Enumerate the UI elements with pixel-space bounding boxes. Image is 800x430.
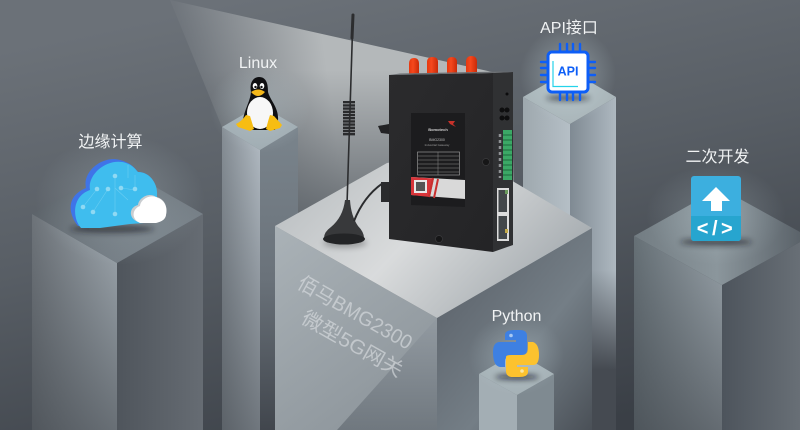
device shell [389, 73, 493, 252]
front label: BMG2300 [429, 138, 445, 142]
back block [170, 0, 523, 430]
caption line 2: 微型5G网关 [298, 306, 407, 382]
front label [411, 113, 465, 207]
icon: Linux penguin [236, 77, 282, 131]
red antenna caps [409, 56, 477, 74]
icon: upload code card: </> [697, 218, 736, 240]
label: API interface: API接口 [540, 19, 598, 37]
magnetic antenna [323, 15, 390, 248]
screws [482, 158, 490, 166]
ethernet ports [497, 188, 509, 241]
side indicators [500, 92, 510, 120]
label: secondary development: 二次开发 [685, 148, 750, 166]
icon: upload code card [680, 176, 752, 246]
label: edge computing: 边缘计算 [78, 132, 143, 151]
caption line 1: 佰马BMG2300 [294, 271, 416, 354]
label: Python: Python [492, 308, 541, 325]
pillar: secondary development [634, 188, 800, 430]
icon: API chip [541, 44, 595, 101]
pillar: Python [479, 352, 554, 430]
front label: Industrial Gateway [425, 143, 450, 147]
icon: API chip: API [558, 64, 578, 78]
icon: Python logo [493, 330, 539, 380]
rotated caption [294, 271, 416, 382]
pillar: API [523, 70, 616, 430]
main block [275, 150, 592, 430]
pillar: edge computing [32, 165, 203, 430]
icon: cloud [70, 159, 167, 233]
label: Linux: Linux [239, 55, 277, 72]
green terminal [500, 130, 512, 180]
router device [389, 56, 513, 252]
pillar: Linux [222, 105, 298, 430]
front label: Bomotech [428, 127, 448, 132]
